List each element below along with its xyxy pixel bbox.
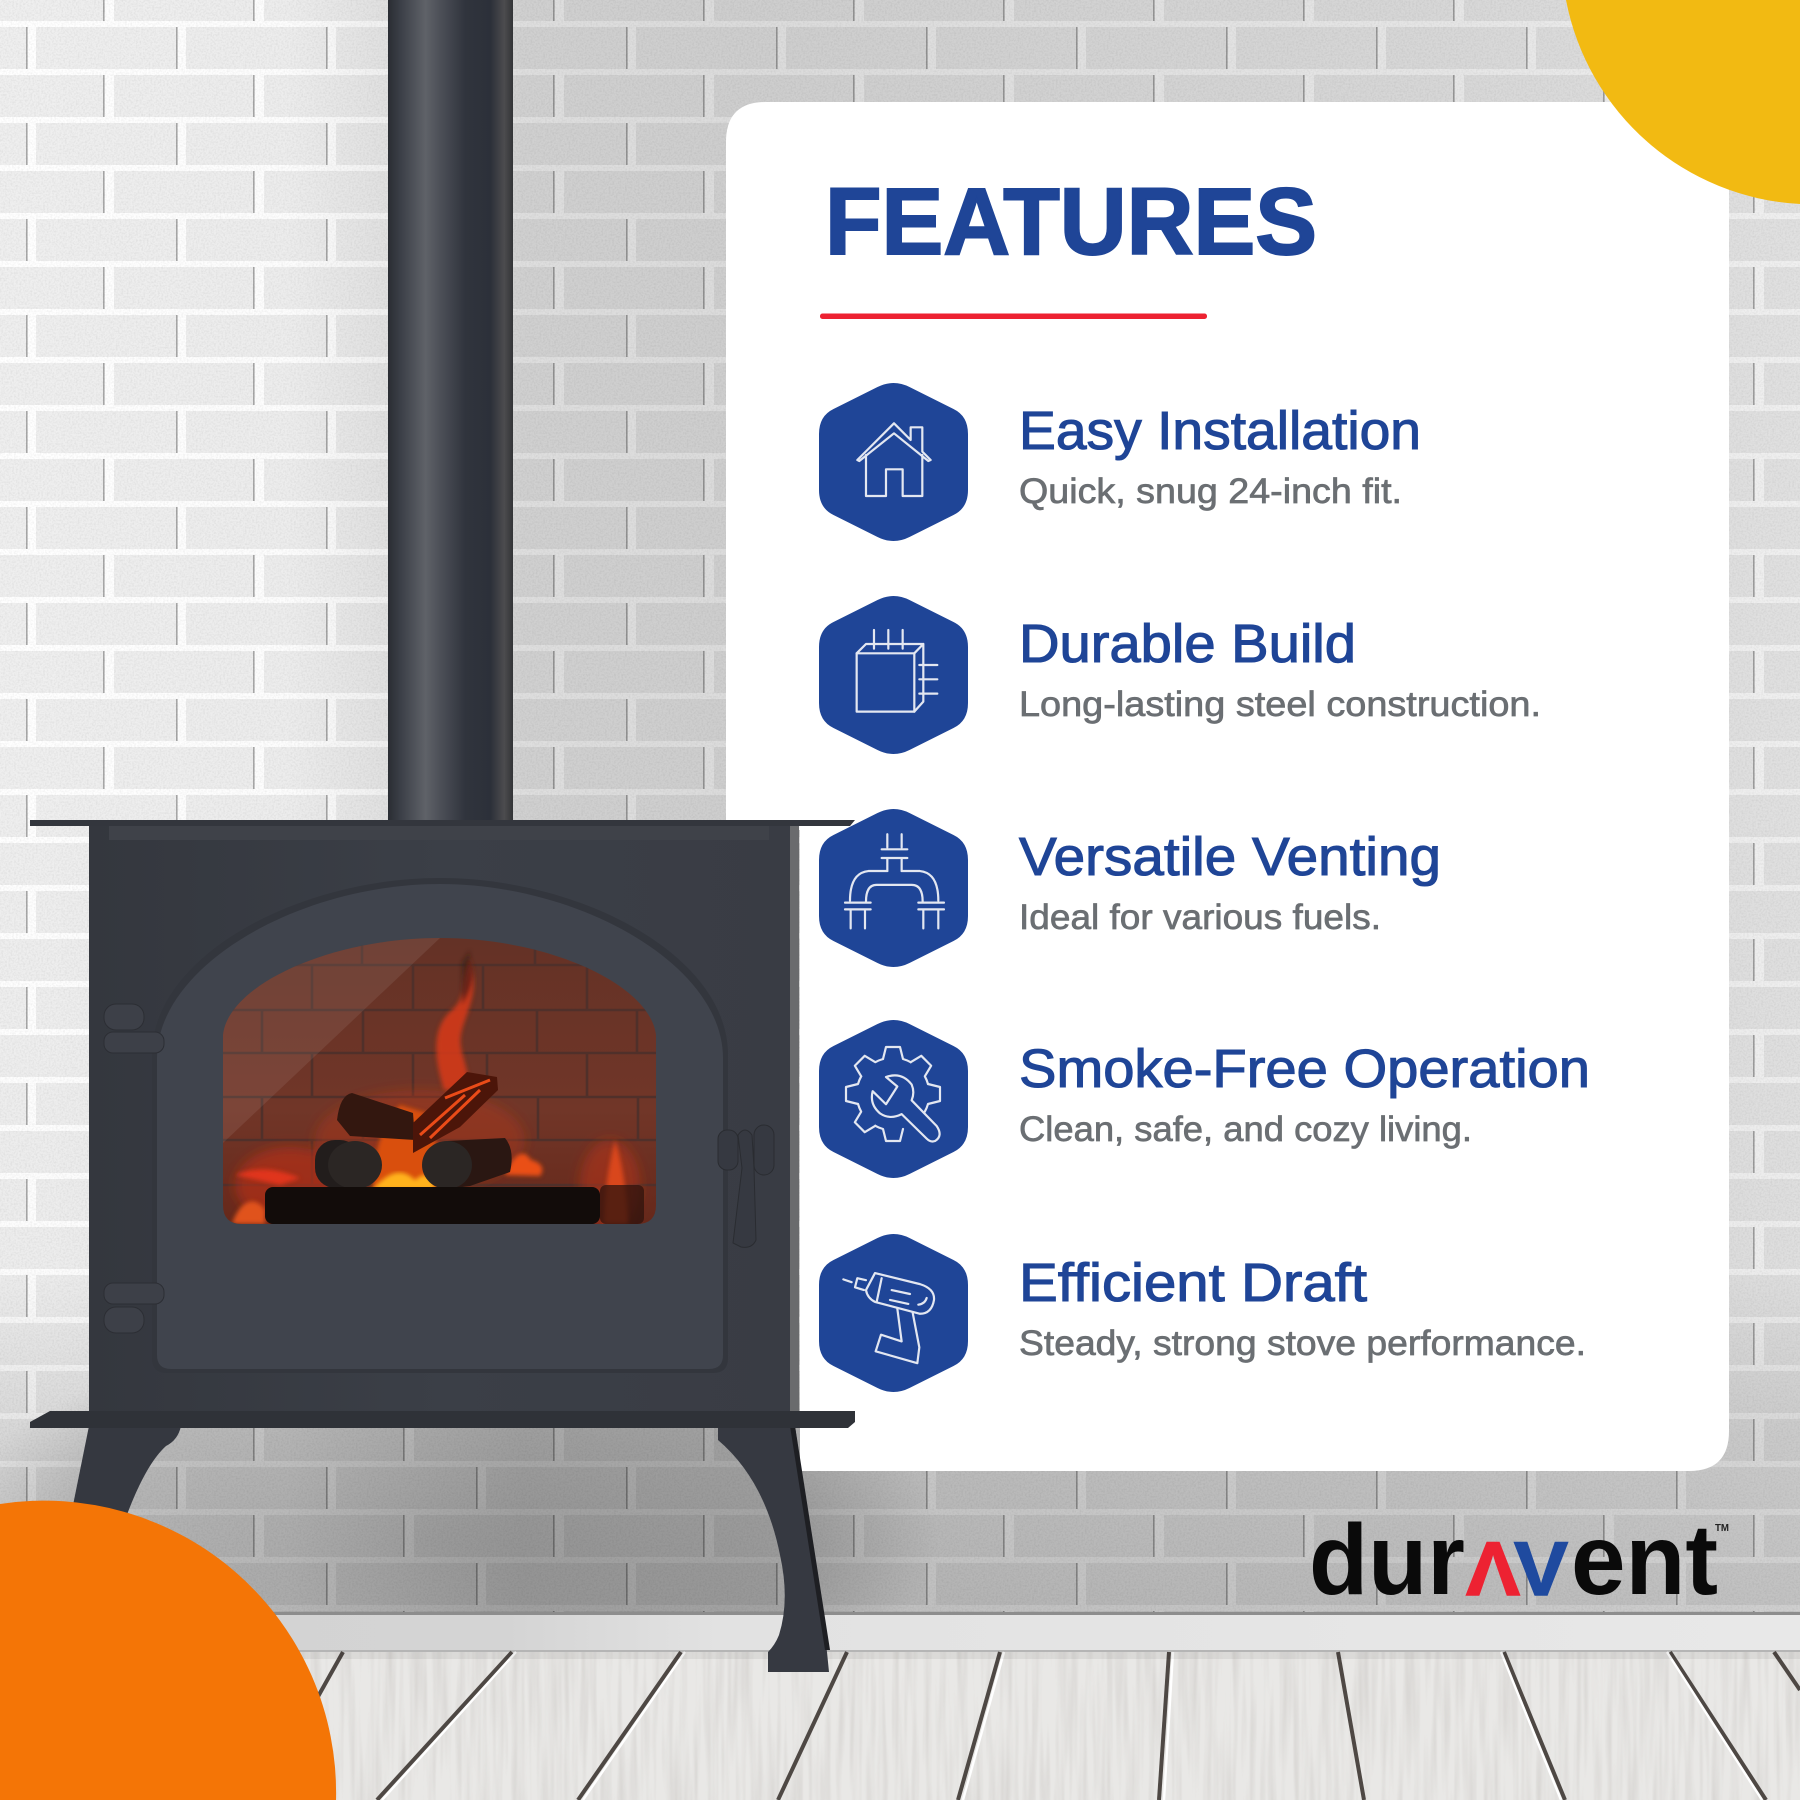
stove door	[152, 878, 728, 1373]
logo: duravent: ent	[1571, 1504, 1718, 1616]
description: Long-lasting steel construction.	[1019, 685, 1541, 724]
stove legs	[70, 1426, 830, 1672]
icon: gear and wrench	[819, 1020, 968, 1178]
logo: duravent	[1309, 1504, 1729, 1616]
wood stove	[30, 820, 855, 1672]
description: Ideal for various fuels.	[1019, 898, 1381, 937]
title: Efficient Draft	[1019, 1253, 1367, 1313]
embers	[372, 1173, 435, 1190]
logo: duravent: dur	[1309, 1504, 1465, 1616]
logs	[265, 1072, 644, 1224]
feature: Versatile Venting	[819, 809, 1441, 967]
logo: duravent: V	[1514, 1527, 1568, 1612]
baseboard	[0, 1612, 1800, 1652]
panel: features card	[726, 102, 1729, 1471]
logo: duravent: Λ	[1466, 1527, 1520, 1612]
top hinge	[104, 1004, 164, 1053]
icon: house	[819, 383, 968, 541]
feature: Durable Build	[819, 596, 1541, 754]
icon: steel box	[819, 596, 968, 754]
logo: duravent: TM	[1715, 1523, 1729, 1534]
title: Durable Build	[1019, 614, 1356, 674]
heading: FEATURES: FEATURES	[825, 169, 1317, 275]
bottom hinge	[104, 1283, 164, 1333]
yellow corner circle	[1566, 0, 1800, 204]
icon: drill	[819, 1234, 968, 1392]
title: Easy Installation	[1019, 401, 1421, 461]
title: Versatile Venting	[1019, 827, 1441, 887]
flames	[232, 950, 628, 1224]
feature: Easy Installation	[819, 383, 1421, 541]
icon: pipes	[819, 809, 968, 967]
bottom plate	[30, 1411, 855, 1428]
description: Clean, safe, and cozy living.	[1019, 1110, 1472, 1149]
glass reflection	[223, 938, 440, 1143]
orange corner circle	[0, 1501, 336, 1800]
top plate	[30, 820, 855, 826]
stove chimney pipe	[388, 0, 513, 822]
wooden floor planks	[0, 1652, 1800, 1800]
door handle	[718, 1125, 774, 1247]
top plate lip	[109, 826, 769, 840]
stove body	[89, 824, 799, 1414]
fire window	[223, 938, 656, 1230]
red glow	[235, 1090, 640, 1230]
feature: Efficient Draft	[819, 1234, 1586, 1392]
feature: Smoke-Free Operation	[819, 1020, 1590, 1178]
right edge highlight	[790, 826, 799, 1412]
description: Steady, strong stove performance.	[1019, 1324, 1586, 1363]
heading underline	[820, 314, 1207, 319]
title: Smoke-Free Operation	[1019, 1039, 1590, 1099]
description: Quick, snug 24-inch fit.	[1019, 472, 1402, 511]
